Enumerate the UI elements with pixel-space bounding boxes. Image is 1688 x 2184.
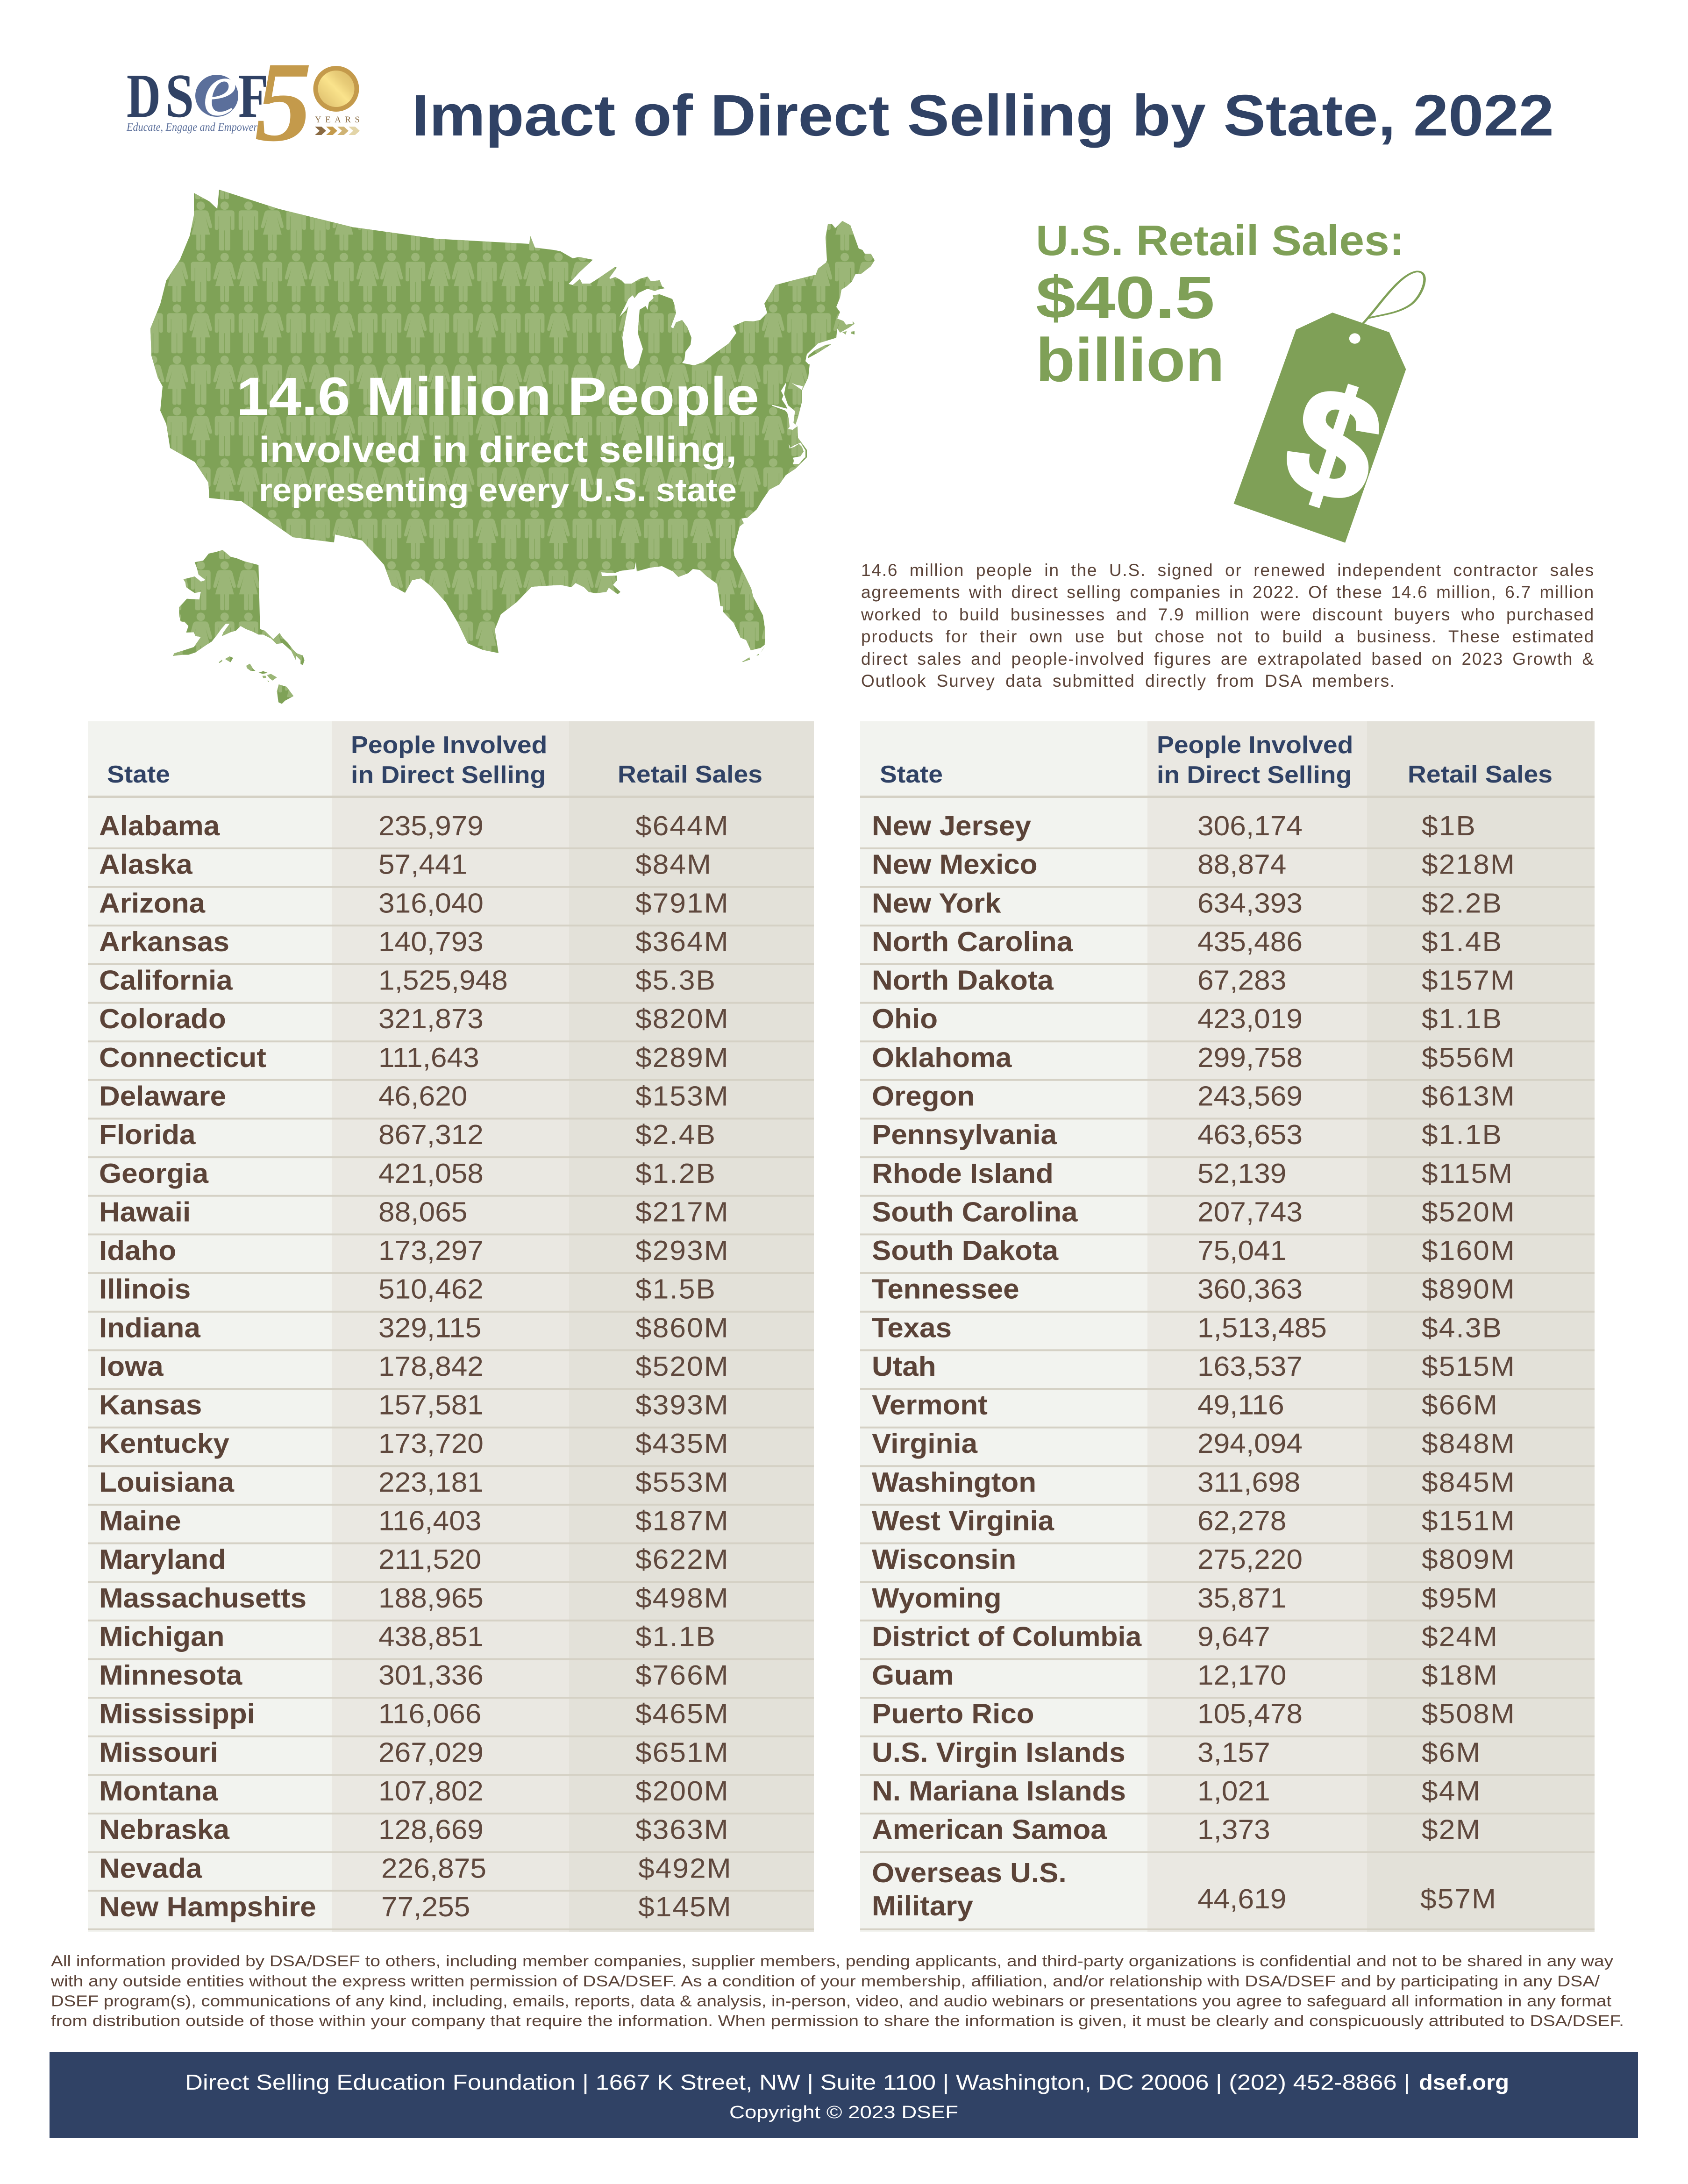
row: Guam: $18M [1422, 1660, 1498, 1691]
row: Alabama [99, 810, 729, 841]
row: District of Columbia: 9,647 [1197, 1621, 1270, 1652]
retail label: U.S. Retail Sales: [1036, 217, 1404, 264]
row: Colorado: Colorado [99, 1003, 226, 1034]
row: N. Mariana Islands: N. Mariana Islands [872, 1775, 1126, 1807]
row: Overseas U.S. Military: Military [872, 1890, 973, 1921]
row: Puerto Rico: 105,478 [1197, 1698, 1303, 1729]
row: Oklahoma: $556M [1422, 1042, 1516, 1073]
row: Arizona [99, 888, 729, 918]
row: Guam: Guam [872, 1659, 954, 1691]
row: Indiana: Indiana [99, 1312, 201, 1343]
row: Florida: 867,312 [378, 1119, 484, 1150]
row: Mississippi [99, 1698, 729, 1729]
row: Ohio: $1.1B [1422, 1003, 1503, 1034]
row: Georgia: 421,058 [378, 1158, 484, 1188]
icon: price tag with dollar sign [1234, 271, 1424, 543]
row: Nebraska: 128,669 [378, 1814, 484, 1845]
row: Wyoming: $95M [1422, 1582, 1498, 1613]
logo wordmark D S F [127, 61, 268, 130]
row: Louisiana: $553M [635, 1466, 729, 1498]
row: South Carolina: South Carolina [872, 1196, 1078, 1227]
row: Guam [872, 1659, 1498, 1691]
row: Michigan: $1.1B [635, 1621, 716, 1652]
tag dollar: $ [1268, 350, 1400, 538]
row: Texas: Texas [872, 1312, 952, 1343]
row: New Mexico: $218M [1422, 849, 1516, 880]
row: Arkansas: $364M [635, 926, 729, 957]
logo years: YEARS [315, 115, 360, 125]
row: Nevada [99, 1853, 732, 1884]
row: Vermont: $66M [1422, 1389, 1498, 1420]
row: Minnesota: $766M [635, 1660, 729, 1691]
row: Arizona: 316,040 [378, 888, 484, 918]
row: Pennsylvania: Pennsylvania [872, 1119, 1057, 1150]
row: Nevada: $492M [638, 1853, 732, 1884]
right table column backgrounds [860, 721, 1595, 1932]
row: New York [872, 888, 1503, 918]
row: Kansas: 157,581 [378, 1389, 484, 1420]
row: California: $5.3B [635, 965, 716, 996]
retail value: $40.5 [1036, 264, 1215, 331]
row: Virginia: Virginia [872, 1428, 978, 1459]
row: U.S. Virgin Islands: U.S. Virgin Islands [872, 1737, 1125, 1768]
row: New Mexico: 88,874 [1197, 849, 1286, 880]
row: Illinois: $1.5B [635, 1273, 716, 1304]
row: West Virginia: 62,278 [1197, 1505, 1286, 1536]
description paragraph: worked to build businesses and 7.9 million were discount buyers who purchased [861, 605, 1595, 624]
row: Oregon: Oregon [872, 1081, 975, 1111]
row: California [99, 965, 716, 996]
row: Ohio: Ohio [872, 1003, 938, 1034]
row: Connecticut [99, 1042, 729, 1073]
row: Utah [872, 1351, 1516, 1382]
row: Arkansas: 140,793 [378, 926, 484, 957]
row: Pennsylvania: 463,653 [1197, 1119, 1303, 1150]
row: Hawaii [99, 1196, 729, 1227]
left table header: People Involved [351, 731, 547, 759]
row: Tennessee [872, 1273, 1516, 1304]
row: Puerto Rico: Puerto Rico [872, 1698, 1034, 1729]
row: Utah: 163,537 [1197, 1351, 1303, 1382]
row: Minnesota [99, 1659, 729, 1691]
row: West Virginia [872, 1505, 1516, 1536]
coastline inlets [772, 383, 805, 464]
row: American Samoa: 1,373 [1197, 1814, 1270, 1845]
row: Massachusetts: Massachusetts [99, 1582, 306, 1613]
description paragraph: agreements with direct selling companies in 2022. Of these 14.6 million, 6.7 million [861, 583, 1595, 602]
row: Arizona: $791M [635, 888, 729, 918]
row: Alaska: 57,441 [378, 849, 467, 880]
row: South Dakota [872, 1235, 1516, 1266]
row: Maryland [99, 1544, 729, 1575]
row: Delaware: Delaware [99, 1081, 226, 1111]
row: Nebraska: $363M [635, 1814, 729, 1845]
row: South Carolina [872, 1196, 1516, 1227]
row: Alabama: 235,979 [378, 810, 484, 841]
row: Virginia [872, 1428, 1516, 1459]
footer website: dsef.org [1419, 2070, 1509, 2094]
row: Overseas U.S. Military [872, 1857, 1497, 1921]
retail sales heading [1036, 217, 1404, 394]
row: Georgia [99, 1158, 716, 1188]
row: Alabama: Alabama [99, 810, 221, 841]
row: South Dakota: 75,041 [1197, 1235, 1286, 1266]
row: North Carolina: North Carolina [872, 926, 1074, 957]
row: Georgia: Georgia [99, 1158, 209, 1188]
row: Montana: Montana [99, 1775, 219, 1807]
table: right [860, 721, 1595, 1932]
left table header: State [107, 761, 170, 788]
row: Oregon [872, 1081, 1516, 1111]
row: North Dakota: North Dakota [872, 965, 1054, 996]
row: Louisiana: Louisiana [99, 1466, 235, 1498]
row: N. Mariana Islands: $4M [1422, 1775, 1481, 1807]
map headline [236, 367, 759, 508]
row: Oklahoma [872, 1042, 1516, 1073]
row: New York: $2.2B [1422, 888, 1503, 918]
left table header: in Direct Selling [351, 761, 546, 789]
row: Ohio: 423,019 [1197, 1003, 1303, 1034]
row: Kentucky: 173,720 [378, 1428, 484, 1459]
legal disclaimer: DSEF program(s), communications of any kind, including, emails, reports, data & analysis, in-person, video, and audio webinars or presentations you agree to safeguard all information in any format [51, 1992, 1611, 2010]
row: N. Mariana Islands: 1,021 [1197, 1775, 1270, 1807]
row: Montana [99, 1775, 729, 1807]
tag body [1234, 313, 1406, 543]
row: Florida [99, 1119, 716, 1150]
description paragraph: Outlook Survey data submitted directly from DSA members. [861, 671, 1396, 690]
row: Virginia: $848M [1422, 1428, 1516, 1459]
row: Texas: $4.3B [1422, 1312, 1503, 1343]
row: Florida: $2.4B [635, 1119, 716, 1150]
description paragraph: 14.6 million people in the U.S. signed or renewed independent contractor sales [861, 561, 1595, 580]
description paragraph: products for their own use but chose not to build a business. These estimated [861, 627, 1595, 646]
row: Idaho: $293M [635, 1235, 729, 1266]
row: American Samoa: American Samoa [872, 1814, 1107, 1845]
row: U.S. Virgin Islands: 3,157 [1197, 1737, 1270, 1768]
left table header [107, 731, 762, 789]
right table header: Retail Sales [1408, 761, 1553, 788]
row: Montana: $200M [635, 1775, 729, 1807]
row: North Dakota: $157M [1422, 965, 1516, 996]
row: California: 1,525,948 [378, 965, 508, 996]
row: Indiana: $860M [635, 1312, 729, 1343]
row: Overseas U.S. Military: Overseas U.S. [872, 1857, 1067, 1888]
row: Rhode Island [872, 1158, 1513, 1188]
row: North Dakota [872, 965, 1516, 996]
row: Connecticut: 111,643 [378, 1042, 479, 1073]
row: Missouri [99, 1737, 729, 1768]
row: Illinois: 510,462 [378, 1273, 484, 1304]
headline line 3: representing every U.S. state [259, 472, 737, 508]
logo five: 5 [255, 38, 312, 165]
row: Minnesota: Minnesota [99, 1659, 243, 1691]
row: Maryland: $622M [635, 1544, 729, 1575]
logo e oval: e [203, 46, 237, 132]
retail unit: billion [1036, 326, 1225, 394]
row: Massachusetts: $498M [635, 1582, 729, 1613]
row: Delaware: $153M [635, 1081, 729, 1111]
row: Delaware [99, 1081, 729, 1111]
row: Connecticut: $289M [635, 1042, 729, 1073]
row: North Carolina [872, 926, 1503, 957]
right table header [880, 731, 1553, 789]
row: Louisiana [99, 1466, 729, 1498]
row: New Hampshire: 77,255 [381, 1891, 470, 1922]
tag string [1362, 271, 1424, 325]
row: Wisconsin: $809M [1422, 1544, 1516, 1575]
row: Colorado: $820M [635, 1003, 729, 1034]
row: Arkansas: Arkansas [99, 926, 229, 957]
row: New Jersey: $1B [1422, 810, 1476, 841]
row: Tennessee: Tennessee [872, 1273, 1019, 1304]
row: South Carolina: 207,743 [1197, 1196, 1303, 1227]
row: Iowa: $520M [635, 1351, 729, 1382]
row: New Jersey: 306,174 [1197, 810, 1303, 841]
right table header: in Direct Selling [1157, 761, 1352, 789]
row: Texas: 1,513,485 [1197, 1312, 1327, 1343]
row: Maryland: 211,520 [378, 1544, 481, 1575]
row: Pennsylvania [872, 1119, 1503, 1150]
row: Connecticut: Connecticut [99, 1042, 266, 1073]
row: Washington: 311,698 [1197, 1466, 1300, 1498]
table: left [88, 721, 814, 1932]
row: Alaska: $84M [635, 849, 712, 880]
left table column backgrounds [88, 721, 814, 1932]
legal disclaimer [50, 1952, 1624, 2029]
headline number: 14.6 Million People [236, 367, 759, 427]
row: Ohio [872, 1003, 1503, 1034]
row: Kansas: Kansas [99, 1389, 202, 1420]
row: Iowa: 178,842 [378, 1351, 484, 1382]
row: Wisconsin: Wisconsin [872, 1544, 1016, 1575]
footer address: Direct Selling Education Foundation | 1667 K Street, NW | Suite 1100 | Washington, DC 20006 | (202) 452-8866 | [185, 2070, 1410, 2094]
row: Wyoming: Wyoming [872, 1582, 1002, 1613]
row: Hawaii: $217M [635, 1196, 729, 1227]
row: Florida: Florida [99, 1119, 196, 1150]
row: Puerto Rico: $508M [1422, 1698, 1516, 1729]
row: Maine: $187M [635, 1505, 729, 1536]
row: Nebraska [99, 1814, 729, 1845]
row: Colorado [99, 1003, 729, 1034]
row: Maine: Maine [99, 1505, 181, 1536]
row: Oregon: 243,569 [1197, 1081, 1303, 1111]
row: Illinois [99, 1273, 716, 1304]
row: New Jersey: New Jersey [872, 810, 1031, 841]
row: Puerto Rico [872, 1698, 1516, 1729]
row: New York: New York [872, 888, 1001, 918]
row: Washington: Washington [872, 1466, 1036, 1498]
row: Virginia: 294,094 [1197, 1428, 1303, 1459]
row: Tennessee: $890M [1422, 1273, 1516, 1304]
row: South Dakota: $160M [1422, 1235, 1516, 1266]
row: Alaska [99, 849, 712, 880]
row: Nebraska: Nebraska [99, 1814, 230, 1845]
row: Kentucky [99, 1428, 729, 1459]
row: Hawaii: 88,065 [378, 1196, 467, 1227]
row: Idaho: Idaho [99, 1235, 176, 1266]
row: Louisiana: 223,181 [378, 1466, 484, 1498]
logo wordmark D S F: S [165, 61, 194, 130]
row: Alabama: $644M [635, 810, 729, 841]
row: North Carolina: $1.4B [1422, 926, 1503, 957]
row: Overseas U.S. Military: 44,619 [1197, 1883, 1286, 1914]
row: U.S. Virgin Islands: $6M [1422, 1737, 1481, 1768]
logo tagline: Educate, Engage and Empower [126, 121, 257, 134]
logo wordmark D S F: F [238, 61, 268, 130]
row: New Jersey [872, 810, 1476, 841]
headline line 2: involved in direct selling, [259, 429, 737, 470]
row: U.S. Virgin Islands [872, 1737, 1481, 1768]
row: Texas [872, 1312, 1503, 1343]
row: Tennessee: 360,363 [1197, 1273, 1303, 1304]
row: Utah: $515M [1422, 1351, 1516, 1382]
row: Pennsylvania: $1.1B [1422, 1119, 1503, 1150]
row: New York: 634,393 [1197, 888, 1303, 918]
row: Nevada: Nevada [99, 1853, 203, 1884]
row: New Hampshire [99, 1891, 732, 1922]
row: New Mexico [872, 849, 1516, 880]
row: Oregon: $613M [1422, 1081, 1516, 1111]
row: New Hampshire: $145M [638, 1891, 732, 1922]
row: American Samoa [872, 1814, 1481, 1845]
row: District of Columbia: District of Columbia [872, 1621, 1142, 1652]
row: Missouri: $651M [635, 1737, 729, 1768]
right table header: State [880, 761, 943, 788]
row: New Hampshire: New Hampshire [99, 1891, 316, 1922]
row: Wisconsin [872, 1544, 1516, 1575]
row: Guam: 12,170 [1197, 1660, 1286, 1691]
logo: DSEF 50 years [126, 38, 360, 165]
row: Kansas [99, 1389, 729, 1420]
row: Oklahoma: 299,758 [1197, 1042, 1303, 1073]
row: Delaware: 46,620 [378, 1081, 467, 1111]
row: Missouri: Missouri [99, 1737, 218, 1768]
left table header: Retail Sales [618, 761, 762, 788]
row: Alaska: Alaska [99, 849, 193, 880]
row: Massachusetts: 188,965 [378, 1582, 484, 1613]
row: West Virginia: West Virginia [872, 1505, 1055, 1536]
title: Impact of Direct Selling by State, 2022 [412, 83, 1554, 148]
row: Kentucky: Kentucky [99, 1428, 229, 1459]
row: Kentucky: $435M [635, 1428, 729, 1459]
description paragraph: direct sales and people-involved figures are extrapolated based on 2023 Growth & [861, 649, 1595, 669]
row: West Virginia: $151M [1422, 1505, 1516, 1536]
right table header: People Involved [1157, 731, 1353, 759]
row: Idaho: 173,297 [378, 1235, 484, 1266]
row: Overseas U.S. Military: $57M [1420, 1883, 1497, 1914]
legal disclaimer: with any outside entities without the express written permission of DSA/DSEF. As a condition of your membership, affiliation, and/or relationship with DSA/DSEF and by participating in any DSA/ [50, 1972, 1600, 1990]
logo zero medallion [313, 66, 359, 112]
row: Vermont: Vermont [872, 1389, 988, 1420]
row: Wyoming: 35,871 [1197, 1582, 1286, 1613]
footer copyright: Copyright © 2023 DSEF [729, 2103, 958, 2122]
row: Mississippi: Mississippi [99, 1698, 255, 1729]
row: Illinois: Illinois [99, 1273, 191, 1304]
row: Wyoming [872, 1582, 1498, 1613]
row: Washington: $845M [1422, 1466, 1516, 1498]
footer band [50, 2052, 1638, 2138]
row: Iowa [99, 1351, 729, 1382]
row: Oklahoma: Oklahoma [872, 1042, 1012, 1073]
row: Nevada: 226,875 [381, 1853, 486, 1884]
row: Maryland: Maryland [99, 1544, 226, 1575]
row: Georgia: $1.2B [635, 1158, 716, 1188]
row: Washington [872, 1466, 1516, 1498]
row: N. Mariana Islands [872, 1775, 1481, 1807]
row: Michigan: 438,851 [378, 1621, 484, 1652]
row: Maine: 116,403 [378, 1505, 481, 1536]
row: Arizona: Arizona [99, 888, 206, 918]
row: District of Columbia: $24M [1422, 1621, 1498, 1652]
row: Missouri: 267,029 [378, 1737, 484, 1768]
row: South Dakota: South Dakota [872, 1235, 1059, 1266]
row: Minnesota: 301,336 [378, 1660, 484, 1691]
row: Rhode Island: $115M [1422, 1158, 1513, 1188]
row: Kansas: $393M [635, 1389, 729, 1420]
legal disclaimer: from distribution outside of those within your company that require the information. When permission to share the information is given, it must be clearly and conspicuously attributed to DSA/DSEF. [51, 2012, 1624, 2029]
row: Michigan: Michigan [99, 1621, 224, 1652]
logo chevrons [315, 127, 360, 135]
row: Utah: Utah [872, 1351, 936, 1382]
row: Montana: 107,802 [378, 1775, 484, 1807]
map fill and people [140, 187, 888, 719]
row: South Carolina: $520M [1422, 1196, 1516, 1227]
row: Massachusetts [99, 1582, 729, 1613]
row: Vermont [872, 1389, 1498, 1420]
row: Idaho [99, 1235, 729, 1266]
row: District of Columbia [872, 1621, 1498, 1652]
row: Wisconsin: 275,220 [1197, 1544, 1303, 1575]
row: American Samoa: $2M [1422, 1814, 1481, 1845]
map: United States with people pattern [140, 187, 888, 719]
row: Mississippi: $465M [635, 1698, 729, 1729]
row: Maine [99, 1505, 729, 1536]
row: Indiana [99, 1312, 729, 1343]
row: Colorado: 321,873 [378, 1003, 484, 1034]
row: Rhode Island: 52,139 [1197, 1158, 1286, 1188]
row: North Carolina: 435,486 [1197, 926, 1303, 957]
row: California: California [99, 965, 233, 996]
description paragraph [861, 559, 1595, 692]
row: Vermont: 49,116 [1197, 1389, 1284, 1420]
row: Rhode Island: Rhode Island [872, 1158, 1054, 1188]
row: Mississippi: 116,066 [378, 1698, 481, 1729]
row: Michigan [99, 1621, 716, 1652]
logo wordmark D S F: D [127, 61, 161, 130]
row: Hawaii: Hawaii [99, 1196, 191, 1227]
row: Indiana: 329,115 [378, 1312, 481, 1343]
row: North Dakota: 67,283 [1197, 965, 1286, 996]
legal disclaimer: All information provided by DSA/DSEF to others, including member companies, supplier members, pending applicants, and third-party organizations is confidential and not to be shared in any way [51, 1952, 1614, 1970]
row: New Mexico: New Mexico [872, 849, 1038, 880]
row: Arkansas [99, 926, 729, 957]
row: Iowa: Iowa [99, 1351, 164, 1382]
